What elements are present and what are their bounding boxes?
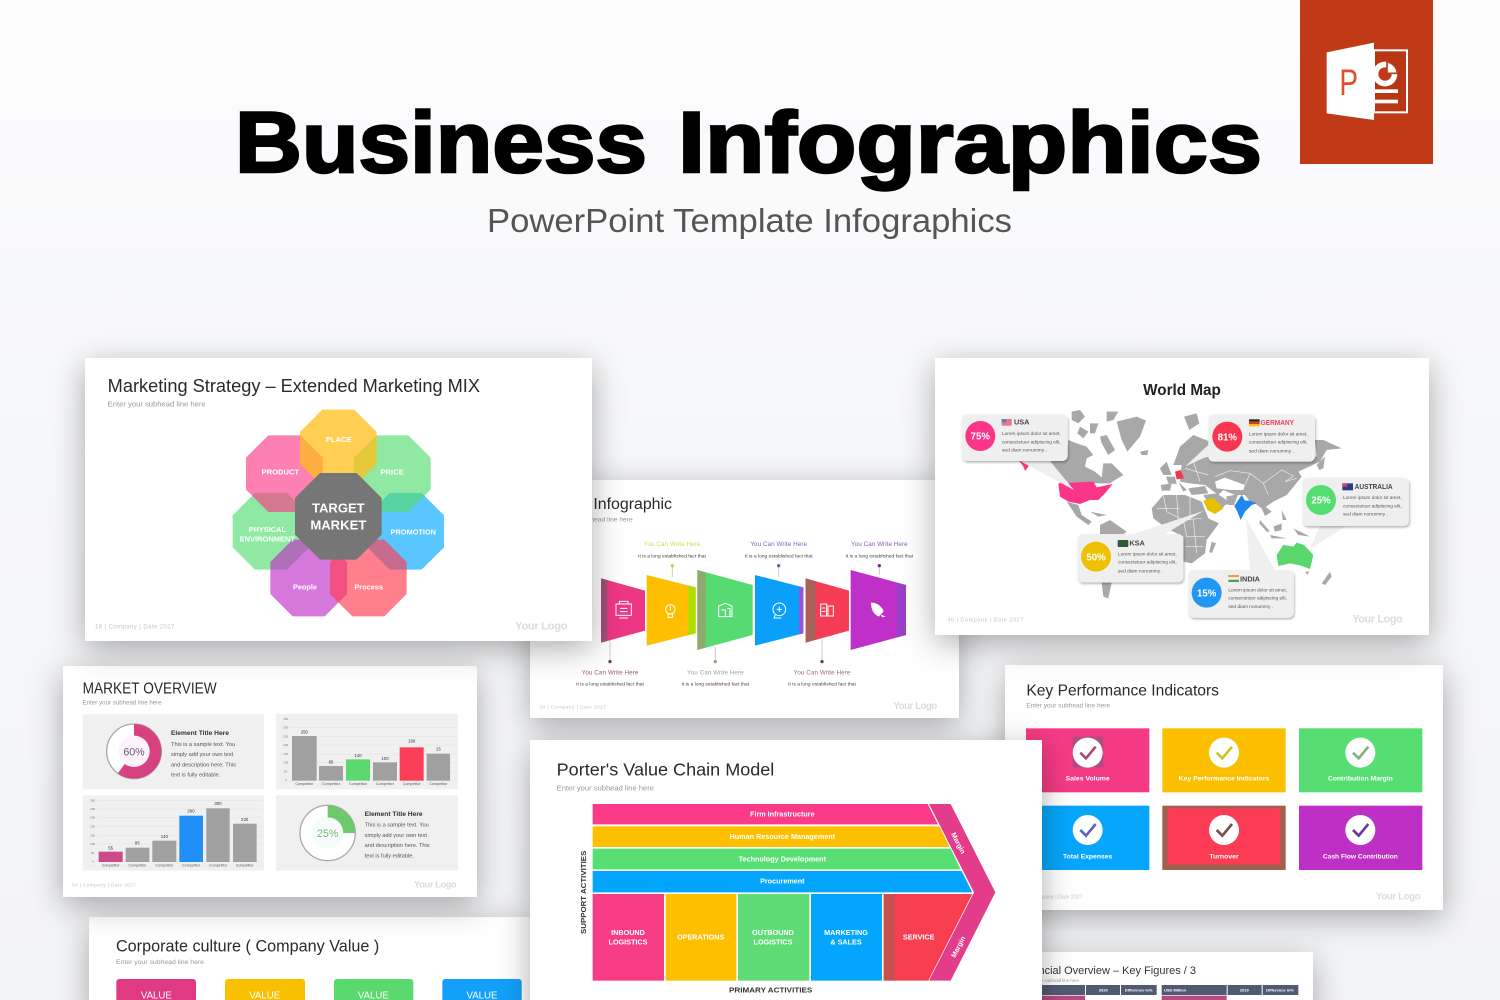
bar chart: competitors bottom: 200 bbox=[90, 825, 95, 829]
KPI card: contribution margin bbox=[1299, 728, 1422, 792]
world map heading: World Map bbox=[1143, 382, 1221, 399]
map country borders bbox=[1157, 462, 1297, 553]
world map slide logo: Your Logo bbox=[1352, 613, 1403, 625]
callout: Australia: 25% bbox=[1311, 496, 1331, 507]
margin label top: Margin bbox=[949, 832, 966, 855]
bar chart: competitors top: Competitor bbox=[295, 782, 314, 786]
callout: USA: Lorem ipsum dolor sit amet, bbox=[1002, 431, 1061, 437]
funnel step 1 bbox=[601, 578, 645, 663]
octagon labels: MARKET bbox=[310, 517, 366, 532]
callout: Australia: sed diam nonummy . bbox=[1343, 512, 1388, 518]
bar chart: competitors top: 140 bbox=[354, 753, 362, 758]
octagon labels: PRODUCT bbox=[261, 467, 299, 476]
KPI slide subhead: Enter your subhead line here bbox=[1026, 702, 1110, 709]
bar chart: competitors bottom: 300 bbox=[90, 807, 95, 811]
support activity: firm infrastructure: Firm Infrastructure bbox=[750, 810, 815, 819]
bar chart: competitors bottom: 0 bbox=[92, 860, 94, 864]
margin label bottom: Margin bbox=[951, 935, 967, 959]
panel: 60% donut: This is a sample text. You bbox=[171, 742, 235, 748]
primary activity: inbound logistics: INBOUND bbox=[611, 928, 645, 937]
bar chart: competitors bottom: 300 bbox=[214, 801, 222, 806]
octagon labels: TARGET bbox=[312, 501, 365, 516]
support activities axis label: SUPPORT ACTIVITIES bbox=[579, 851, 588, 934]
subtitle: PowerPoint Template Infographics bbox=[487, 202, 1012, 239]
panel: Porter's value chain slide bbox=[530, 740, 1042, 1000]
financial slide subhead: Enter your subhead line here bbox=[1023, 978, 1080, 983]
primary activity: outbound logistics: LOGISTICS bbox=[754, 937, 793, 946]
callout: KSA bbox=[1078, 534, 1183, 582]
panel: corporate culture slide bbox=[89, 917, 530, 1000]
top captions: It is a long established fact that bbox=[745, 553, 813, 558]
KPI card: key performance indicators: Key Performance Indicators bbox=[1179, 776, 1270, 783]
KPI card: sales volume bbox=[1026, 728, 1149, 792]
bar chart: competitors top: 85 bbox=[329, 759, 334, 764]
Porter slide title: Porter's Value Chain Model bbox=[557, 760, 774, 780]
panel: 60% donut: text is fully editable. bbox=[171, 772, 221, 778]
callout: Germany: consectetuer adipiscing elit, bbox=[1249, 440, 1308, 446]
bar chart: competitors bottom: 150 bbox=[90, 833, 95, 837]
primary activity: marketing and sales: MARKETING bbox=[824, 928, 868, 937]
bar chart: competitors top: 200 bbox=[283, 743, 288, 747]
callout: India: Lorem ipsum dolor sit amet, bbox=[1228, 587, 1287, 593]
callout: KSA: consectetuer adipiscing elit, bbox=[1118, 560, 1177, 566]
octagon labels: ENVIRONMENT bbox=[240, 534, 295, 543]
octagon: people bbox=[270, 540, 347, 616]
callout: USA: consectetuer adipiscing elit, bbox=[1002, 439, 1061, 445]
financial tables bbox=[1007, 985, 1298, 1000]
callout: KSA: KSA bbox=[1129, 539, 1146, 548]
octagon labels: PROMOTION bbox=[391, 528, 436, 537]
bottom captions bbox=[576, 670, 857, 687]
bar chart: competitors bottom: Competitor bbox=[236, 864, 254, 868]
callout: Australia: AUSTRALIA bbox=[1355, 482, 1393, 491]
market overview logo: Your Logo bbox=[414, 879, 457, 889]
bar chart: competitors bottom: 250 bbox=[90, 816, 95, 820]
bar chart: competitors top: Competitor bbox=[403, 782, 421, 786]
bar chart: competitors bottom: 230 bbox=[241, 817, 249, 822]
octagon: product bbox=[246, 435, 323, 512]
callout: Germany: 81% bbox=[1218, 432, 1237, 443]
main title bbox=[235, 95, 1262, 191]
callout: Germany: GERMANY bbox=[1261, 418, 1294, 427]
infographic slide logo: Your Logo bbox=[893, 701, 937, 712]
bar chart: competitors bottom: Competitor bbox=[182, 864, 201, 868]
market overview title: MARKET OVERVIEW bbox=[83, 680, 217, 697]
callout: India: consectetuer adipiscing elit, bbox=[1228, 596, 1287, 602]
panel: 25% donut: simply add your own text bbox=[365, 833, 427, 839]
bar chart: competitors bottom bbox=[83, 795, 264, 871]
top captions bbox=[638, 541, 914, 558]
panel: 60% donut: and description here. This bbox=[171, 762, 236, 768]
bar chart: competitors top: 0 bbox=[285, 778, 287, 782]
KPI slide title: Key Performance Indicators bbox=[1026, 682, 1219, 699]
panel: 60% donut: Element Title Here bbox=[171, 730, 229, 737]
bar chart: competitors bottom: 100 bbox=[90, 842, 95, 846]
value cards bbox=[116, 979, 522, 1000]
octagon labels: People bbox=[293, 582, 317, 591]
funnel step 3 bbox=[697, 570, 753, 663]
world map slide footer: 46 | Company | Date 2027 bbox=[947, 618, 1023, 624]
support activity: human resource management bbox=[593, 826, 950, 847]
primary activities axis label: PRIMARY ACTIVITIES bbox=[729, 985, 812, 994]
world map eastern hemisphere bbox=[1152, 440, 1342, 585]
panel: 25% donut: 25% bbox=[317, 828, 339, 840]
market overview footer: 54 | Company | Date 2027 bbox=[72, 883, 136, 889]
bar chart: competitors bottom: Competitor bbox=[128, 864, 147, 868]
financial tables: Difference in% bbox=[1266, 987, 1294, 992]
bar chart: competitors top: 100 bbox=[283, 761, 288, 765]
panel: 25% donut bbox=[276, 795, 458, 871]
primary activity: operations bbox=[666, 894, 736, 981]
primary activity: inbound logistics bbox=[593, 894, 664, 981]
panel: 60% donut: simply add your own text bbox=[171, 752, 234, 758]
funnel step 5 bbox=[806, 578, 849, 663]
callout: USA: sed diam nonummy . bbox=[1002, 448, 1047, 454]
bar chart: competitors top: 190 bbox=[408, 739, 416, 744]
panel: 60% donut: 60% bbox=[123, 746, 145, 758]
octagon: price bbox=[354, 435, 431, 512]
bar chart: competitors top: Competitor bbox=[322, 782, 341, 786]
callout: Australia: consectetuer adipiscing elit, bbox=[1343, 503, 1402, 509]
map highlight: Australia bbox=[1277, 543, 1313, 569]
map highlight: Saudi Arabia bbox=[1203, 498, 1223, 514]
KPI card: cash flow contribution bbox=[1299, 806, 1422, 870]
primary activity: service bbox=[884, 894, 972, 981]
bar chart: competitors bottom: Competitor bbox=[155, 864, 174, 868]
callout: KSA: Lorem ipsum dolor sit amet, bbox=[1118, 551, 1177, 557]
support activity: procurement bbox=[593, 871, 972, 892]
bar chart: competitors top bbox=[276, 714, 458, 789]
KPI card: turnover: Turnover bbox=[1209, 853, 1239, 860]
callout: Australia: Lorem ipsum dolor sit amet, bbox=[1343, 495, 1402, 501]
marketing slide title: Marketing Strategy – Extended Marketing MIX bbox=[108, 375, 480, 396]
callout: Germany bbox=[1208, 414, 1315, 462]
panel: market overview slide bbox=[63, 666, 477, 897]
panel: infographic slide bbox=[530, 480, 959, 718]
callout: India: 15% bbox=[1197, 588, 1217, 599]
KPI card: cash flow contribution: Cash Flow Contribution bbox=[1323, 853, 1398, 860]
financial tables: 2019 bbox=[1240, 987, 1250, 992]
bar chart: competitors top: 250 bbox=[301, 730, 309, 735]
panel: 60% donut bbox=[83, 714, 264, 789]
corporate slide subhead: Enter your subhead line here bbox=[116, 959, 205, 966]
bar chart: competitors bottom: 140 bbox=[161, 834, 169, 839]
octagon: place bbox=[300, 410, 377, 486]
panel: marketing strategy slide bbox=[85, 358, 592, 641]
support activity: firm infrastructure bbox=[593, 804, 938, 824]
octagon: physical environment bbox=[233, 493, 309, 570]
margin chevron bbox=[929, 804, 995, 981]
bar chart: competitors bottom: 350 bbox=[90, 798, 95, 802]
octagon labels: PLACE bbox=[326, 435, 352, 444]
KPI card: sales volume: Sales Volume bbox=[1066, 776, 1110, 783]
callout: Australia bbox=[1302, 478, 1409, 526]
map inner white region bbox=[1215, 478, 1245, 490]
main title: Business bbox=[235, 95, 647, 191]
bottom captions: You Can Write Here bbox=[794, 670, 851, 677]
callout: India: INDIA bbox=[1240, 574, 1261, 583]
top captions: You Can Write Here bbox=[644, 541, 701, 548]
callout: India: sed diam nonummy . bbox=[1228, 604, 1273, 610]
bar chart: competitors bottom: Competitor bbox=[102, 864, 120, 868]
support activity: technology development: Technology Development bbox=[739, 854, 827, 863]
octagon: target market centre bbox=[295, 473, 382, 560]
octagon labels: PHYSICAL bbox=[249, 525, 286, 534]
marketing slide footer: 18 | Company | Date 2027 bbox=[95, 625, 175, 631]
top captions: You Can Write Here bbox=[851, 541, 908, 548]
bar chart: competitors top: 350 bbox=[283, 717, 288, 721]
panel: 25% donut: text is fully editable. bbox=[365, 853, 414, 859]
primary activity: inbound logistics: LOGISTICS bbox=[609, 937, 648, 946]
KPI slide logo: Your Logo bbox=[1376, 891, 1421, 902]
bar chart: competitors top: 15 bbox=[436, 747, 441, 752]
octagon labels: Process bbox=[354, 582, 383, 591]
callout: India bbox=[1188, 570, 1294, 618]
bottom captions: You Can Write Here bbox=[582, 670, 639, 677]
panel: 25% donut: This is a sample text. You bbox=[365, 823, 429, 829]
icon: PowerPoint badge: P bbox=[1339, 61, 1358, 103]
infographic slide title: Infographic bbox=[593, 496, 672, 513]
financial tables: USD Million bbox=[1164, 987, 1187, 992]
panel: world map slide bbox=[935, 358, 1429, 635]
bar chart: competitors bottom: 55 bbox=[108, 845, 114, 850]
KPI card: total expenses bbox=[1026, 806, 1149, 870]
primary activity: marketing and sales: & SALES bbox=[830, 937, 862, 946]
map highlight: India bbox=[1234, 495, 1257, 520]
bar chart: competitors top: Competitor bbox=[376, 782, 395, 786]
bar chart: competitors top: 250 bbox=[283, 734, 288, 738]
map highlight: Alaska bbox=[1019, 461, 1030, 471]
bar chart: competitors top: 100 bbox=[381, 756, 389, 761]
octagon: process bbox=[330, 540, 407, 616]
marketing slide subhead: Enter your subhead line here bbox=[108, 399, 206, 408]
bottom captions: It is a long established fact that bbox=[788, 682, 857, 687]
callout: USA bbox=[962, 414, 1068, 461]
panel: 25% donut: and description here. This bbox=[365, 843, 430, 849]
panel: 25% donut: Element Title Here bbox=[365, 811, 423, 818]
map highlight: USA bbox=[1058, 482, 1113, 504]
octagon labels: PRICE bbox=[380, 467, 404, 476]
support activity: procurement: Procurement bbox=[760, 877, 805, 886]
callout: KSA: 50% bbox=[1086, 552, 1106, 563]
bottom captions: You Can Write Here bbox=[687, 670, 744, 677]
map highlight: Germany bbox=[1175, 470, 1184, 479]
market overview subhead: Enter your subhead line here bbox=[83, 700, 162, 707]
financial tables: 2020 bbox=[1099, 987, 1109, 992]
marketing slide logo: Your Logo bbox=[515, 621, 568, 633]
bar chart: competitors top: 300 bbox=[283, 726, 288, 730]
corporate slide title: Corporate culture ( Company Value ) bbox=[116, 936, 379, 955]
funnel step 4 bbox=[755, 564, 803, 646]
KPI card: total expenses: Total Expenses bbox=[1063, 853, 1113, 860]
bar chart: competitors top: Competitor bbox=[429, 782, 448, 786]
callout pointers bbox=[1020, 443, 1347, 570]
primary activity: service: SERVICE bbox=[903, 933, 935, 942]
primary activity: operations: OPERATIONS bbox=[677, 933, 724, 942]
primary activity: outbound logistics: OUTBOUND bbox=[752, 928, 794, 937]
bar chart: competitors bottom: Competitor bbox=[209, 864, 228, 868]
KPI card: contribution margin: Contribution Margin bbox=[1328, 776, 1393, 783]
panel: financial overview slide bbox=[1000, 952, 1313, 1000]
KPI card: turnover bbox=[1162, 806, 1286, 870]
top captions: You Can Write Here bbox=[750, 541, 807, 548]
top captions: It is a long established fact that bbox=[638, 553, 707, 558]
KPI slide footer: 30 | Company | Date 2027 bbox=[1021, 895, 1083, 901]
funnel step 2 bbox=[647, 564, 696, 646]
bottom captions: It is a long established fact that bbox=[576, 682, 645, 687]
bar chart: competitors bottom: 85 bbox=[135, 841, 140, 846]
octagon labels bbox=[240, 435, 436, 591]
callout: KSA: sed diam nonummy . bbox=[1118, 568, 1163, 574]
infographic slide subhead: Enter your subhead line here bbox=[547, 516, 633, 523]
infographic slide footer: 30 | Company | Date 2027 bbox=[539, 704, 606, 710]
primary activity: outbound logistics bbox=[738, 894, 809, 981]
bar chart: competitors bottom: 50 bbox=[91, 851, 95, 855]
KPI card: key performance indicators bbox=[1162, 728, 1286, 792]
top captions: It is a long established fact that bbox=[845, 553, 914, 558]
octagon: promotion bbox=[367, 493, 444, 570]
financial tables: Difference in% bbox=[1125, 987, 1153, 992]
callout: Germany: sed diam nonummy . bbox=[1249, 448, 1294, 454]
bar chart: competitors top: Competitor bbox=[349, 782, 368, 786]
bar chart: competitors top: 50 bbox=[284, 769, 288, 773]
panel: key performance indicators slide bbox=[1005, 665, 1443, 910]
bar chart: competitors top: 150 bbox=[283, 752, 288, 756]
world map western hemisphere bbox=[1050, 410, 1210, 598]
main title: Infographics bbox=[678, 95, 1262, 191]
bottom captions: It is a long established fact that bbox=[681, 682, 750, 687]
financial slide title: Financial Overview – Key Figures / 3 bbox=[1017, 965, 1196, 977]
support activity: human resource management: Human Resource Management bbox=[730, 832, 836, 841]
callout: USA: USA bbox=[1014, 418, 1030, 427]
icon: PowerPoint badge bbox=[1300, 0, 1433, 164]
Porter slide subhead: Enter your subhead line here bbox=[557, 783, 654, 792]
support activity: technology development bbox=[593, 849, 961, 869]
funnel step 6 bbox=[851, 564, 906, 650]
callout: USA: 75% bbox=[971, 432, 990, 443]
bar chart: competitors bottom: 260 bbox=[187, 809, 195, 814]
primary activity: marketing and sales bbox=[811, 894, 882, 981]
callout: Germany: Lorem ipsum dolor sit amet, bbox=[1249, 431, 1308, 437]
